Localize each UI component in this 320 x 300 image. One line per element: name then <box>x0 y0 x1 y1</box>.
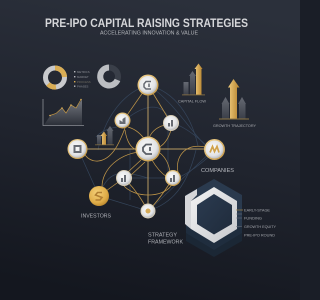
node: investors gold coin <box>89 186 109 206</box>
node: lower left <box>116 170 132 186</box>
legend: MARKET <box>77 75 89 79</box>
investors label: INVESTORS <box>81 214 112 220</box>
donut chart: gold and silver <box>46 68 64 87</box>
legend <box>74 70 91 88</box>
subtitle: ACCELERATING INNOVATION & VALUE <box>100 30 198 36</box>
capital flow label: CAPITAL FLOW <box>178 100 206 104</box>
node: left <box>68 139 88 159</box>
title: PRE-IPO CAPITAL RAISING STRATEGIES <box>45 18 248 30</box>
legend: METRICS <box>77 70 90 74</box>
node: upper left <box>114 112 130 128</box>
stage list with leader lines: GROWTH EQUITY <box>244 224 276 229</box>
node: right <box>204 139 225 160</box>
node: lower right <box>165 170 181 186</box>
node: strategy <box>140 204 156 218</box>
legend: PHASES <box>77 84 88 88</box>
stage list with leader lines: PRE-IPO ROUND <box>244 232 275 238</box>
stage list with leader lines: EARLY-STAGE <box>244 208 270 212</box>
strategy framework label: STRATEGY <box>148 232 177 238</box>
strategy framework label <box>148 232 183 246</box>
stage list with leader lines: FUNDING <box>244 216 262 220</box>
node: upper right <box>163 115 179 131</box>
network gold connection lines <box>78 85 214 211</box>
growth trajectory arrows <box>219 79 249 120</box>
node: top <box>138 74 158 96</box>
growth trajectory label: GROWTH TRAJECTORY <box>213 123 256 128</box>
strategy framework label: FRAMEWORK <box>148 240 183 246</box>
layered hexagon <box>185 179 242 257</box>
small rising arrows icon <box>95 126 114 145</box>
legend: PROCESS <box>77 80 91 84</box>
node: center <box>136 136 160 162</box>
ring gauge chart <box>100 68 118 86</box>
capital flow arrows <box>182 64 205 95</box>
line chart <box>43 99 84 126</box>
stage list with leader lines <box>236 208 276 238</box>
companies label: COMPANIES <box>201 168 234 174</box>
network blue connection lines <box>78 85 214 211</box>
